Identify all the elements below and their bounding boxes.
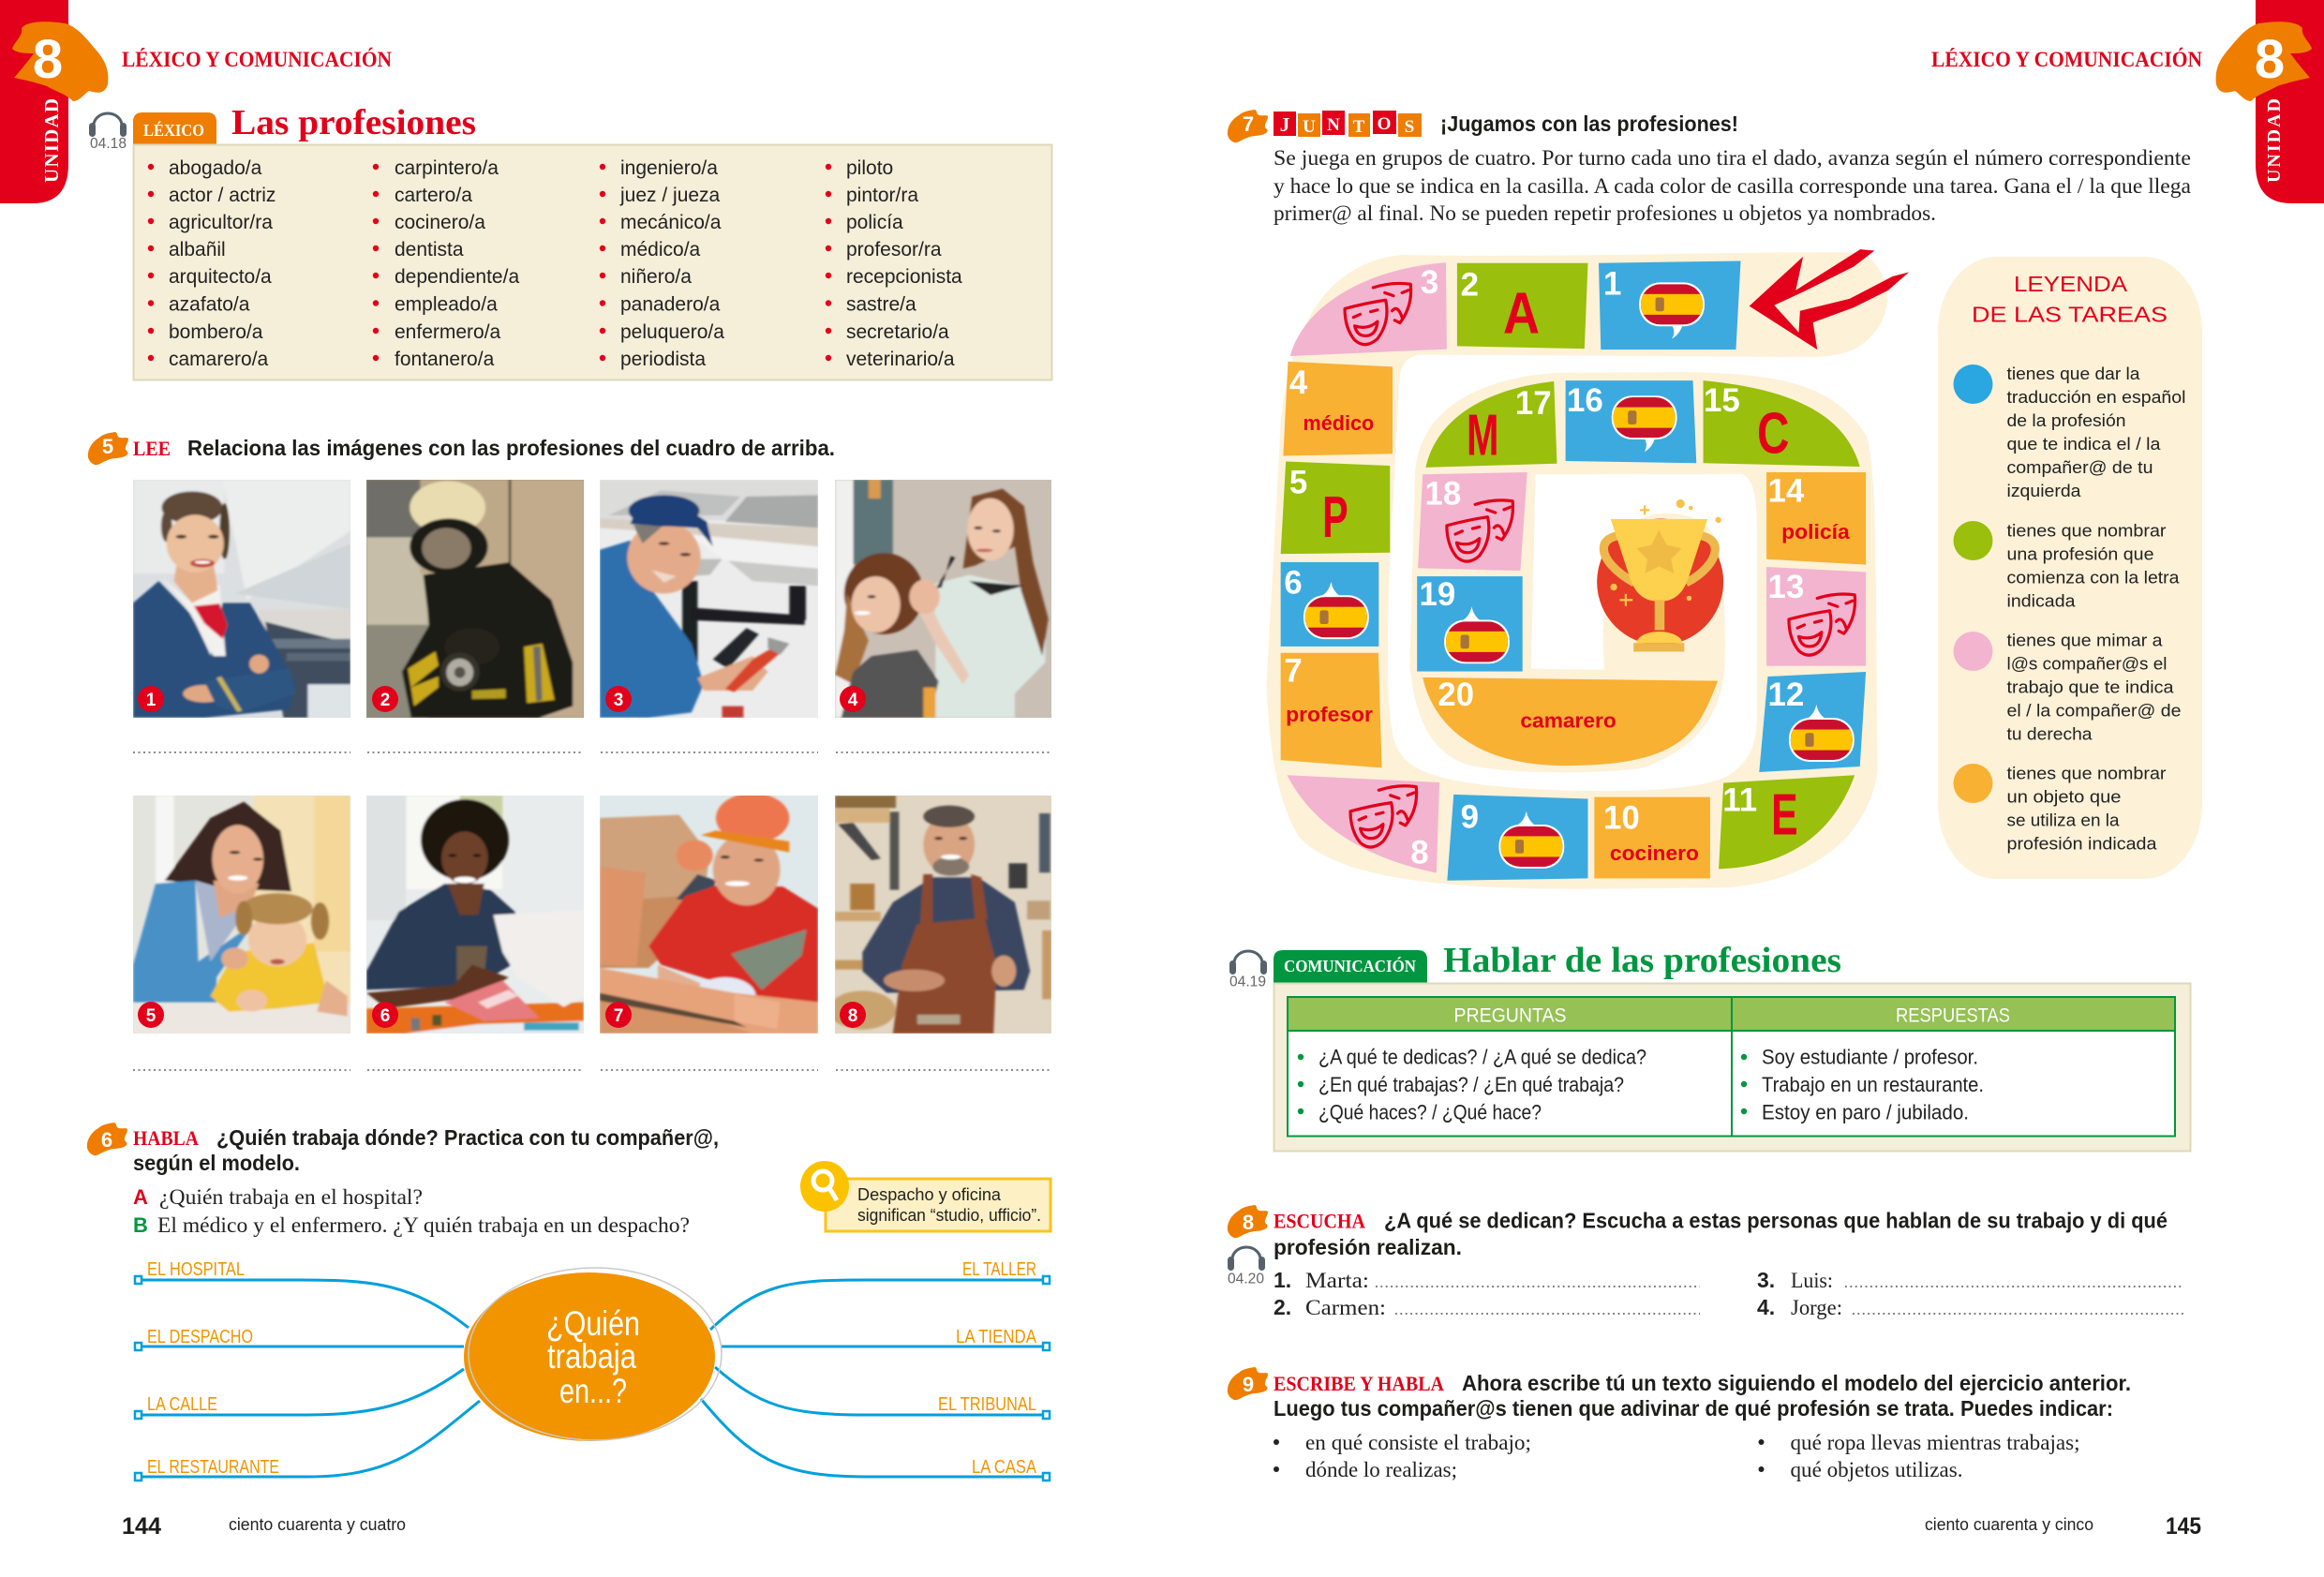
panel: legend of tasks: tu derecha: [2007, 723, 2093, 744]
photo 3: plumber: [600, 480, 818, 718]
panel: questions and answers table: Estoy en paro / jubilado.: [1762, 1100, 1969, 1124]
square numbers: 20: [1438, 677, 1474, 713]
number badges on the photos: 1: [146, 691, 156, 710]
instructions paragraph: primer@ al final. No se pueden repetir profesiones u objetos ya nombrados.: [1274, 201, 1936, 225]
panel: legend of tasks: tienes que dar la: [2007, 364, 2140, 383]
start arrow: [1750, 249, 1909, 350]
square letters and words: C: [1757, 401, 1789, 466]
number badges on the photos: 5: [146, 1006, 156, 1026]
panel: legend of tasks: [1938, 257, 2202, 879]
exercise 5 heading: 5: [102, 435, 113, 458]
panel: vocabulary list: [133, 144, 1051, 380]
panel: legend of tasks: trabajo que te indica: [2007, 677, 2174, 697]
audio icon 04.19: 04.19: [1229, 974, 1266, 989]
photo 6: seamstress: [366, 796, 584, 1034]
panel: legend of tasks: que te indica el / la: [2007, 434, 2161, 454]
number badges on the photos: 7: [614, 1006, 623, 1026]
panel: vocabulary list: dependiente/a: [395, 266, 519, 288]
mind map: who works where: EL RESTAURANTE: [147, 1457, 279, 1478]
panel: vocabulary list: panadero/a: [620, 294, 721, 315]
photo 8: carpenter: [828, 796, 1051, 1034]
square letters and words: A: [1503, 282, 1540, 347]
mind map: who works where: [135, 1259, 1050, 1480]
square numbers: [1284, 264, 1805, 870]
board squares: [1281, 260, 1866, 881]
square numbers: 16: [1567, 382, 1603, 419]
panel: vocabulary list: veterinario/a: [846, 349, 955, 370]
square numbers: 5: [1289, 464, 1307, 500]
number badges on the photos: 3: [614, 691, 623, 710]
panel: legend of tasks: DE LAS TAREAS: [1972, 302, 2168, 326]
panel: vocabulary list: arquitecto/a: [169, 266, 272, 288]
mind map: who works where: en...?: [559, 1372, 627, 1410]
panel: vocabulary list: profesor/ra: [846, 239, 942, 260]
exercise 9 heading: 9: [1243, 1373, 1254, 1396]
panel: legend of tasks: LEYENDA: [2014, 272, 2128, 296]
panel: vocabulary list: cocinero/a: [395, 212, 485, 233]
fill-in answers: [1274, 1268, 2183, 1319]
square letters and words: M: [1467, 404, 1498, 469]
exercise 9 heading: ESCRIBE Y HABLA: [1274, 1372, 1444, 1395]
panel: vocabulary list: secretario/a: [846, 321, 949, 343]
panel: legend of tasks: se utiliza en la: [2007, 810, 2120, 830]
right page header: LÉXICO Y COMUNICACIÓN: [1931, 47, 2202, 71]
left unit tab: 8: [33, 29, 63, 90]
panel: vocabulary list: actor / actriz: [169, 185, 276, 206]
fill-in answers: 4.: [1757, 1295, 1775, 1319]
left page footer: ciento cuarenta y cuatro: [229, 1515, 406, 1534]
panel: legend of tasks: una profesión que: [2007, 543, 2153, 564]
number badges on the photos: 2: [380, 691, 390, 710]
square numbers: 1: [1603, 265, 1621, 302]
panel: questions and answers table: ¿A qué te dedicas? / ¿A qué se dedica?: [1318, 1046, 1646, 1068]
trophy: [1597, 499, 1723, 651]
model dialogue: [133, 1185, 690, 1237]
audio icon 04.20: 04.20: [1228, 1271, 1264, 1287]
square numbers: 19: [1419, 576, 1455, 613]
instructions paragraph: [1274, 146, 2191, 225]
exercise 6 heading: HABLA: [133, 1126, 199, 1150]
panel: vocabulary list: recepcionista: [846, 266, 962, 288]
square letters and words: profesor: [1286, 703, 1373, 726]
exercise 7 heading: ¡Jugamos con las profesiones!: [1440, 112, 1738, 136]
mind map: who works where: EL DESPACHO: [147, 1327, 253, 1347]
mind map: who works where: trabaja: [547, 1337, 636, 1376]
photo 4: hairdresser: [835, 480, 1051, 718]
fill-in answers: 1.: [1274, 1268, 1291, 1292]
callout: note on vocabulary: significan “studio, ufficio”.: [857, 1206, 1041, 1225]
right page footer: [1925, 1513, 2201, 1540]
right unit tab: 8: [2255, 29, 2285, 90]
left unit tab: UNIDAD: [40, 98, 63, 183]
panel: vocabulary list: enfermero/a: [395, 321, 501, 343]
panel: vocabulary list: médico/a: [620, 239, 701, 260]
audio icon 04.19: [1229, 951, 1267, 989]
comunicacion tab: [1274, 950, 1427, 983]
exercise 5 heading: [88, 432, 835, 465]
audio icon 04.20: [1228, 1247, 1265, 1287]
mind map: who works where: EL TRIBUNAL: [938, 1394, 1036, 1415]
right page footer: 145: [2166, 1513, 2201, 1540]
left page footer: [122, 1513, 406, 1540]
square numbers: 18: [1424, 475, 1461, 512]
square numbers: 15: [1704, 382, 1740, 419]
panel: vocabulary list: abogado/a: [169, 157, 262, 179]
number badges on the photos: [138, 686, 866, 1028]
panel: vocabulary list: sastre/a: [846, 294, 916, 315]
model dialogue: A: [133, 1185, 148, 1209]
panel: legend of tasks: traducción en español: [2007, 387, 2185, 407]
photo 1: flight attendant: [133, 480, 350, 718]
panel: questions and answers table: RESPUESTAS: [1896, 1004, 2010, 1027]
instructions paragraph: Se juega en grupos de cuatro. Por turno cada uno tira el dado, avanza según el número correspondiente: [1274, 146, 2191, 170]
callout: note on vocabulary: [800, 1161, 1050, 1231]
callout: note on vocabulary: Despacho y oficina: [857, 1184, 1002, 1204]
panel: legend of tasks: l@s compañer@s el: [2007, 654, 2167, 673]
square letters and words: cocinero: [1610, 841, 1699, 865]
square numbers: 3: [1421, 264, 1438, 301]
exercise 7 heading: S: [1405, 117, 1414, 137]
panel: vocabulary list: bombero/a: [169, 321, 263, 343]
photo 2: firefighter: [366, 480, 584, 719]
square numbers: 17: [1515, 385, 1552, 422]
model dialogue: B: [133, 1213, 148, 1237]
left unit tab: [0, 0, 108, 203]
lexico tab: LÉXICO: [143, 120, 204, 140]
square numbers: 7: [1284, 653, 1303, 690]
fill-in answers: Carmen:: [1305, 1296, 1386, 1319]
panel: questions and answers table: Soy estudiante / profesor.: [1762, 1046, 1978, 1068]
panel: vocabulary list: niñero/a: [620, 266, 692, 288]
exercise 6 heading: [87, 1123, 719, 1175]
square numbers: 8: [1410, 834, 1429, 870]
lexico tab: [133, 112, 216, 144]
mind map: who works where: EL HOSPITAL: [147, 1259, 245, 1280]
exercise 7 heading: U: [1303, 117, 1316, 137]
right page footer: ciento cuarenta y cinco: [1925, 1515, 2093, 1534]
board game: [1266, 249, 1909, 889]
theatre masks: [1345, 283, 1855, 847]
board track: [1266, 252, 1887, 889]
panel: vocabulary list: empleado/a: [395, 294, 498, 315]
square numbers: 13: [1767, 569, 1804, 605]
exercise 8 heading: 8: [1243, 1211, 1254, 1234]
panel: legend of tasks: tienes que nombrar: [2007, 763, 2167, 783]
mind map: who works where: EL TALLER: [962, 1259, 1036, 1280]
left page header: LÉXICO Y COMUNICACIÓN: [122, 47, 392, 71]
heading: Las profesiones: Las profesiones: [231, 103, 476, 142]
square numbers: 10: [1603, 800, 1640, 837]
square letters and words: [1286, 282, 1850, 865]
mind map: who works where: LA TIENDA: [956, 1327, 1037, 1347]
photo 5: teacher with child: [133, 796, 350, 1034]
panel: vocabulary list: cartero/a: [395, 185, 472, 206]
exercise 9 bullet list: qué ropa llevas mientras trabajas;: [1790, 1431, 2080, 1454]
model dialogue: El médico y el enfermero. ¿Y quién trabaja en un despacho?: [157, 1213, 690, 1237]
panel: vocabulary list: policía: [846, 212, 903, 233]
panel: vocabulary list: piloto: [846, 157, 893, 179]
model dialogue: ¿Quién trabaja en el hospital?: [159, 1185, 423, 1209]
square numbers: 4: [1289, 364, 1308, 401]
square letters and words: médico: [1304, 411, 1374, 435]
panel: legend of tasks: el / la compañer@ de: [2007, 701, 2182, 720]
panel: vocabulary list: agricultor/ra: [169, 212, 273, 233]
exercise 6 heading: 6: [101, 1128, 112, 1152]
panel: legend of tasks: tienes que mimar a: [2007, 630, 2163, 650]
exercise 7 heading: 7: [1243, 112, 1254, 136]
exercise 8 heading: ¿A qué se dedican? Escucha a estas personas que hablan de su trabajo y di qué: [1384, 1209, 2168, 1233]
audio icon 04.18: [89, 113, 127, 152]
panel: vocabulary list: juez / jueza: [619, 185, 721, 206]
exercise 6 heading: según el modelo.: [133, 1151, 300, 1175]
square numbers: 9: [1461, 799, 1479, 836]
exercise 8 heading: profesión realizan.: [1274, 1235, 1462, 1259]
panel: vocabulary list: peluquero/a: [620, 321, 724, 343]
exercise 7 heading: T: [1353, 117, 1365, 137]
square letters and words: camarero: [1520, 709, 1616, 733]
exercise 5 heading: Relaciona las imágenes con las profesiones del cuadro de arriba.: [187, 436, 835, 460]
photo 7: bricklayer: [600, 793, 818, 1034]
panel: vocabulary list: periodista: [620, 349, 706, 370]
left page footer: 144: [122, 1513, 161, 1540]
mind map: who works where: LA CASA: [972, 1457, 1037, 1478]
exercise 7 heading: [1228, 110, 1738, 142]
exercise 8 heading: [1228, 1205, 2168, 1259]
panel: vocabulary list: dentista: [395, 239, 464, 260]
panel: vocabulary list: fontanero/a: [395, 349, 495, 370]
exercise 9 bullet list: en qué consiste el trabajo;: [1305, 1431, 1531, 1454]
fill-in answers: 3.: [1757, 1268, 1775, 1292]
exercise 9 heading: Luego tus compañer@s tienen que adivinar de qué profesión se trata. Puedes indicar:: [1274, 1396, 2113, 1421]
panel: legend of tasks: tienes que nombrar: [2007, 521, 2167, 540]
fill-in answers: 2.: [1274, 1295, 1291, 1319]
exercise 7 heading: N: [1327, 115, 1340, 135]
fill-in answers: Marta:: [1305, 1269, 1369, 1292]
panel: questions and answers table: ¿En qué trabajas? / ¿En qué trabaja?: [1318, 1073, 1624, 1096]
panel: questions and answers table: PREGUNTAS: [1454, 1004, 1567, 1027]
panel: vocabulary list: pintor/ra: [846, 185, 918, 206]
mind map: who works where: ¿Quién: [546, 1304, 640, 1343]
panel: legend of tasks: compañer@ de tu: [2007, 457, 2153, 477]
exercise 9 bullet list: qué objetos utilizas.: [1790, 1458, 1962, 1481]
panel: legend of tasks: profesión indicada: [2007, 834, 2157, 853]
right unit tab: [2216, 0, 2324, 203]
instructions paragraph: y hace lo que se indica en la casilla. A cada color de casilla corresponde una tarea. Gana el / la que llega: [1274, 174, 2191, 198]
panel: vocabulary list: azafato/a: [169, 294, 250, 315]
square numbers: 11: [1722, 781, 1757, 818]
exercise 9 bullet list: [1274, 1431, 2080, 1481]
panel: legend of tasks: de la profesión: [2007, 410, 2125, 430]
flags: [1304, 282, 1855, 869]
exercise 7 heading: O: [1378, 114, 1391, 134]
mind map: who works where: LA CALLE: [147, 1394, 217, 1415]
panel: vocabulary list: carpintero/a: [395, 157, 499, 179]
right unit tab: UNIDAD: [2264, 98, 2285, 183]
fill-in answers: Luis:: [1791, 1269, 1833, 1292]
square numbers: 14: [1767, 473, 1805, 510]
panel: vocabulary list: mecánico/a: [620, 212, 722, 233]
panel: vocabulary list: ingeniero/a: [620, 157, 718, 179]
exercise 8 heading: ESCUCHA: [1274, 1209, 1365, 1233]
exercise 9 bullet list: dónde lo realizas;: [1305, 1458, 1457, 1481]
heading: Hablar de las profesiones: Hablar de las profesiones: [1443, 941, 1841, 980]
square letters and words: policía: [1781, 520, 1850, 543]
panel: vocabulary list: albañil: [169, 239, 226, 260]
square numbers: 12: [1767, 677, 1804, 713]
exercise 6 heading: ¿Quién trabaja dónde? Practica con tu compañer@,: [216, 1125, 719, 1150]
panel: vocabulary list: camarero/a: [169, 349, 269, 370]
number badges on the photos: 8: [848, 1006, 857, 1026]
panel: questions and answers table: ¿Qué haces? / ¿Qué hace?: [1318, 1100, 1542, 1124]
number badges on the photos: 4: [848, 691, 858, 710]
exercise 9 heading: [1228, 1367, 2131, 1421]
exercise 5 heading: LEE: [133, 437, 171, 460]
panel: questions and answers table: Trabajo en un restaurante.: [1762, 1073, 1984, 1096]
panel: legend of tasks: izquierda: [2007, 481, 2081, 500]
exercise 9 heading: Ahora escribe tú un texto siguiendo el modelo del ejercicio anterior.: [1462, 1371, 2131, 1395]
audio icon 04.18: 04.18: [90, 136, 127, 152]
exercise 7 heading: J: [1280, 113, 1289, 136]
fill-in answers: Jorge:: [1791, 1296, 1842, 1319]
square numbers: 6: [1284, 564, 1303, 601]
panel: legend of tasks: un objeto que: [2007, 787, 2122, 806]
panel: questions and answers table: [1274, 984, 2191, 1151]
panel: legend of tasks: indicada: [2007, 590, 2076, 611]
number badges on the photos: 6: [380, 1006, 390, 1026]
square letters and words: P: [1322, 485, 1348, 550]
panel: legend of tasks: comienza con la letra: [2007, 568, 2180, 587]
square numbers: 2: [1461, 267, 1479, 304]
square letters and words: E: [1771, 783, 1798, 848]
comunicacion tab: COMUNICACIÓN: [1284, 956, 1416, 975]
